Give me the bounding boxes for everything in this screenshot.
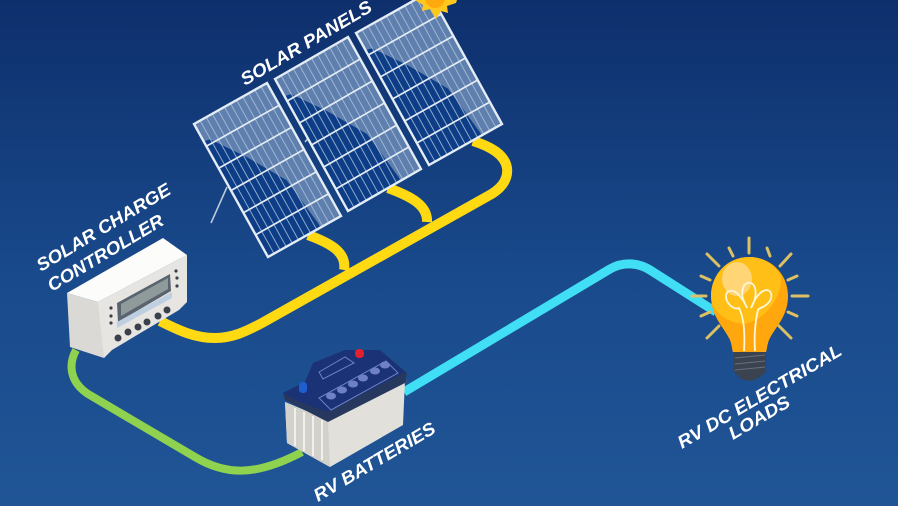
wire: charge controller to batteries <box>72 350 302 471</box>
label: RV batteries: RV BATTERIES <box>310 418 439 505</box>
label: RV DC electrical loads: RV DC ELECTRICAL <box>674 340 845 452</box>
bulb rays <box>692 238 808 338</box>
panel support struts <box>211 124 320 223</box>
icon: sun <box>415 0 457 19</box>
label: solar panels: SOLAR PANELS <box>237 0 375 89</box>
solar panel 3 <box>356 0 502 165</box>
RV battery <box>283 349 407 467</box>
solar charge controller <box>67 238 187 358</box>
wire: solar panels to charge controller <box>160 141 507 338</box>
solar panel 1 <box>194 83 341 257</box>
wire: batteries to loads <box>404 264 716 392</box>
icon: light bulb <box>692 238 808 381</box>
bulb screw base <box>734 352 766 381</box>
label: RV DC electrical loads: LOADS <box>725 392 794 443</box>
label: solar charge controller: CONTROLLER <box>44 210 167 295</box>
solar panel 2 <box>275 37 421 211</box>
bulb filament <box>726 283 771 351</box>
battery terminal: positive <box>355 349 364 358</box>
label: solar charge controller: SOLAR CHARGE <box>33 179 175 275</box>
battery terminal: negative <box>299 382 307 393</box>
bulb glass <box>711 257 788 352</box>
